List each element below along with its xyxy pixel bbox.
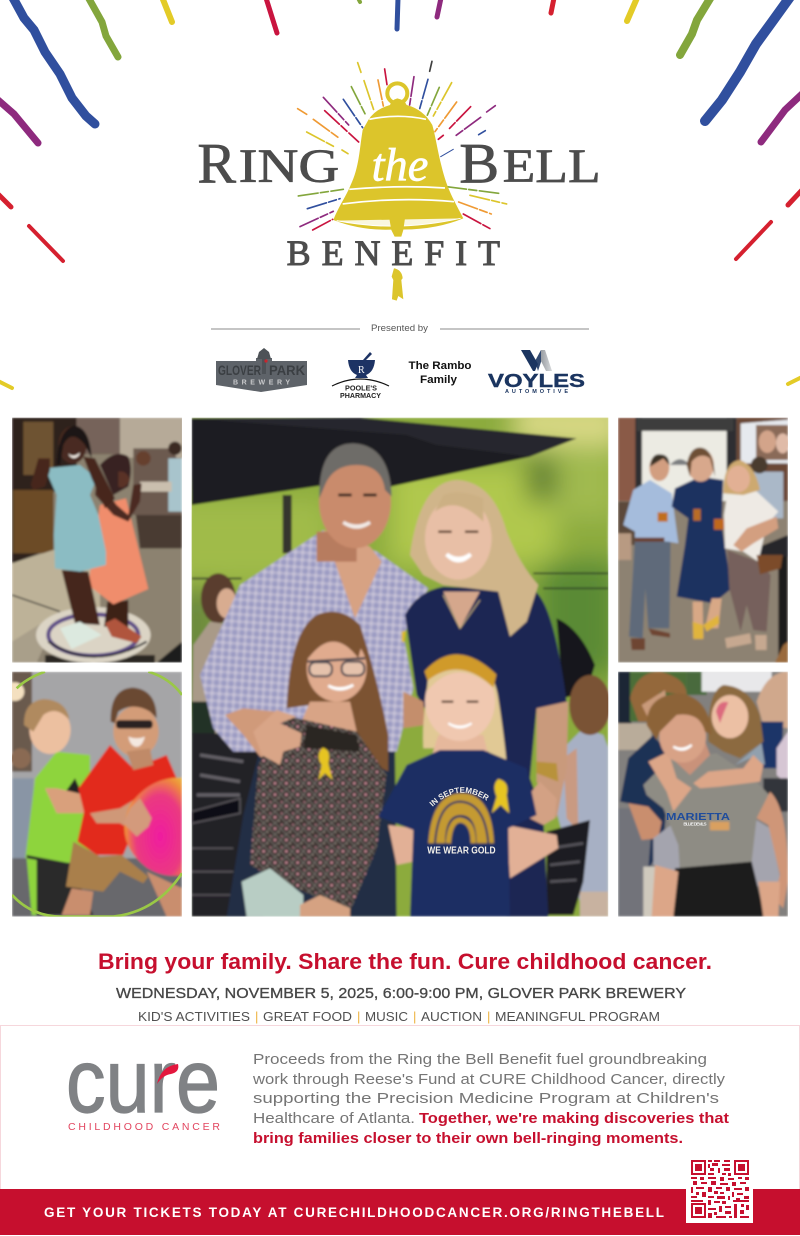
sponsor logo: Voyles Automotive: VOYLES (488, 371, 585, 391)
event activities: | (413, 1009, 416, 1024)
man's forearm (403, 692, 425, 728)
event activities: | (487, 1009, 490, 1024)
umbrella (192, 418, 576, 458)
woman white (727, 550, 771, 632)
t-shirt text: IN SEPTEMBER (429, 787, 489, 806)
girl (708, 685, 763, 758)
bell (333, 83, 463, 301)
tagline: Bring your family. Share the fun. Cure childhood cancer. (98, 949, 712, 974)
woman navy (672, 477, 732, 603)
sponsor logo: Poole's Pharmacy: PHARMACY (340, 393, 381, 400)
description paragraph: bring families closer to their own bell-ringing moments. (253, 1130, 683, 1147)
logo: CURE Childhood Cancer: CHILDHOOD CANCER (68, 1121, 220, 1133)
hand on shoulder (253, 710, 302, 765)
ribbon left (318, 748, 333, 780)
sponsor logo: Glover Park Brewery: GLOVER (218, 362, 261, 378)
info panel border (0, 1026, 800, 1189)
event activities: | (357, 1009, 360, 1024)
description paragraph: Proceeds from the Ring the Bell Benefit fuel groundbreaking (253, 1051, 707, 1068)
photo: adults with drinks (618, 418, 789, 663)
sponsor logo: Poole's Pharmacy: R (358, 365, 365, 376)
event activities: KID'S ACTIVITIES (138, 1009, 250, 1024)
chairs (192, 733, 263, 917)
BENEFIT wordmark: BENEFIT (287, 233, 500, 273)
photo: family portrait (192, 418, 608, 917)
sponsor logo: Poole's Pharmacy (332, 352, 389, 400)
photo: girls on turntable (12, 418, 183, 663)
shirt text: BLUE DEVILS (683, 822, 707, 827)
description paragraph: supporting the Precision Medicine Program at Children's (253, 1090, 719, 1107)
sponsor logo: Glover Park Brewery (216, 348, 307, 392)
sponsor logo: Voyles Automotive (488, 350, 585, 395)
t-shirt text: WE WEAR GOLD (427, 846, 496, 857)
event activities: MUSIC (365, 1009, 408, 1024)
hoop (12, 672, 182, 917)
description paragraph: Together, we're making discoveries that (419, 1110, 729, 1127)
man (629, 538, 671, 638)
RING wordmark: R (197, 133, 237, 196)
RING wordmark: ING (239, 141, 339, 193)
BELL wordmark: B (459, 133, 499, 196)
girl right (422, 682, 508, 762)
photo: boys with ball (6, 672, 182, 917)
logo: CURE Childhood Cancer: cure (66, 1032, 220, 1132)
call to action bar: GET YOUR TICKETS TODAY AT CURECHILDHOODCANCER.ORG/RINGTHEBELL (44, 1205, 664, 1220)
description paragraph (252, 1051, 729, 1147)
event date and venue: WEDNESDAY, NOVEMBER 5, 2025, 6:00-9:00 PM, GLOVER PARK BREWERY (116, 986, 686, 1002)
shirt text (666, 813, 730, 826)
BELL wordmark (459, 133, 601, 196)
event activities (138, 1009, 660, 1024)
man (227, 742, 397, 917)
logo rays (298, 61, 507, 230)
red boy (77, 745, 177, 855)
background people (201, 573, 236, 623)
sponsor: The Rambo Family: Family (420, 374, 458, 386)
description paragraph: Healthcare of Atlanta. (253, 1110, 415, 1127)
back teen (620, 735, 670, 868)
event activities: MEANINGFUL PROGRAM (495, 1009, 660, 1024)
call to action bar (0, 1189, 800, 1235)
logo: Ring the Bell Benefit (197, 61, 601, 301)
RING wordmark (197, 133, 339, 196)
presented by divider: Presented by (371, 323, 428, 334)
woman (537, 702, 568, 818)
the script: the (372, 140, 428, 192)
event activities: | (255, 1009, 258, 1024)
boy (643, 753, 769, 882)
sponsor logo: Voyles Automotive: AUTOMOTIVE (505, 389, 568, 395)
sponsor: The Rambo Family (408, 360, 472, 386)
photo: teens piggyback (618, 672, 788, 917)
girl 1 (62, 570, 100, 625)
ribbon right (492, 779, 509, 813)
sponsor logo: Glover Park Brewery: PARK (269, 362, 305, 378)
rainbow (428, 793, 494, 843)
decorative confetti rays (0, 0, 800, 388)
sponsor: The Rambo Family: The Rambo (408, 360, 472, 372)
shirt text: MARIETTA (666, 812, 731, 823)
description paragraph: work through Reese's Fund at CURE Childhood Cancer, directly (252, 1071, 726, 1088)
event activities: AUCTION (421, 1009, 482, 1024)
girl 2 (104, 600, 128, 628)
event activities: GREAT FOOD (263, 1009, 352, 1024)
table (778, 555, 788, 662)
QR code (686, 1158, 753, 1223)
sponsor logo: Poole's Pharmacy: POOLE'S (345, 386, 377, 392)
BELL wordmark: ELL (503, 141, 601, 193)
girl left (287, 612, 388, 772)
ball (124, 778, 182, 876)
green boy (25, 752, 90, 863)
sponsor logo: Glover Park Brewery: BREWERY (233, 380, 290, 386)
t-shirt text (427, 787, 496, 854)
